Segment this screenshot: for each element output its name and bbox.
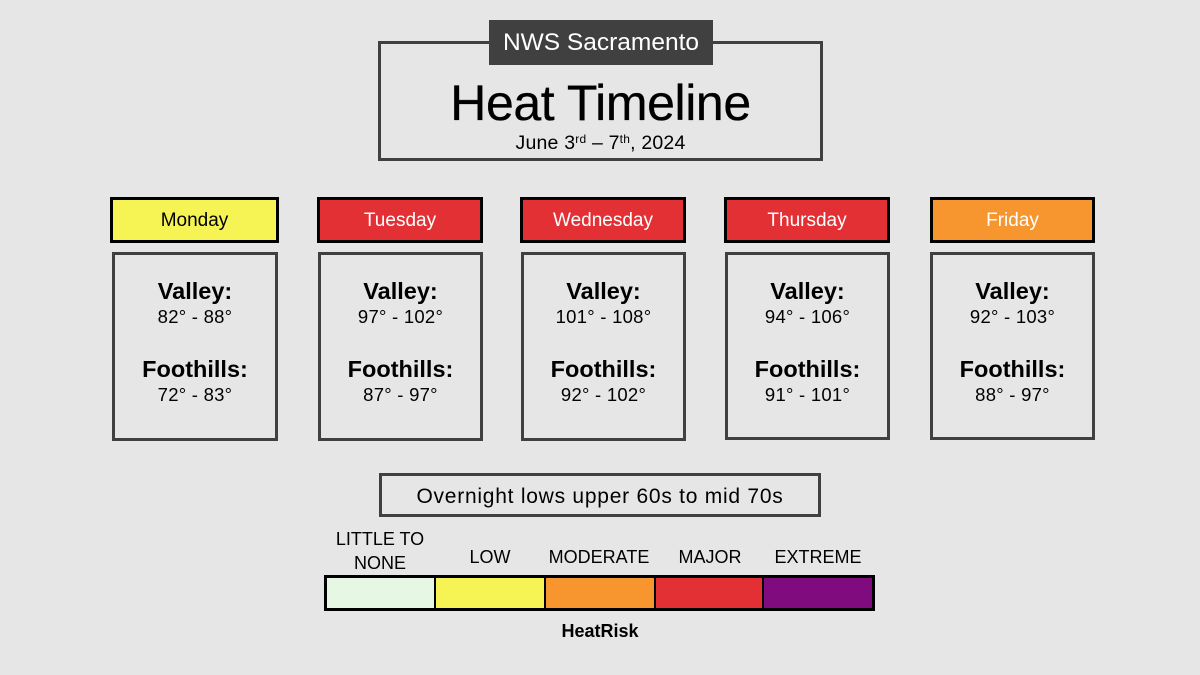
callout: overnight lows: Overnight lows upper 60s to mid 70s xyxy=(416,485,784,508)
swatch: moderate xyxy=(546,578,654,608)
day header: Thursday: Thursday xyxy=(767,210,847,231)
legend label: major: MAJOR xyxy=(678,547,742,567)
panel: Tuesday temperatures: Foothills: xyxy=(348,356,453,382)
panel: Wednesday temperatures: 101° - 108° xyxy=(556,306,651,327)
day header: Friday: Friday xyxy=(986,210,1039,231)
day header: Wednesday xyxy=(520,197,686,243)
panel: Tuesday temperatures: 97° - 102° xyxy=(358,306,443,327)
day header: Tuesday xyxy=(317,197,483,243)
legend label: low: LOW xyxy=(469,547,510,567)
HeatRisk colour scale xyxy=(324,575,875,611)
panel: Tuesday temperatures: 87° - 97° xyxy=(363,384,438,405)
panel: Monday temperatures xyxy=(112,252,278,441)
day header: Friday xyxy=(930,197,1095,243)
panel: Friday temperatures xyxy=(930,252,1095,440)
day header: Monday xyxy=(110,197,279,243)
day header: Monday: Monday xyxy=(161,210,228,231)
panel: Friday temperatures: 92° - 103° xyxy=(970,306,1055,327)
legend label: extreme: EXTREME xyxy=(774,547,862,567)
panel: Thursday temperatures xyxy=(725,252,890,440)
swatch: extreme xyxy=(764,578,872,608)
swatch: low xyxy=(436,578,544,608)
day header: Tuesday: Tuesday xyxy=(364,210,436,231)
day header: Thursday xyxy=(724,197,890,243)
badge: NWS Sacramento xyxy=(489,20,713,65)
panel: Wednesday temperatures: Foothills: xyxy=(551,356,656,382)
panel: Friday temperatures: Valley: xyxy=(975,278,1050,304)
legend label: little to none: NONE xyxy=(354,553,406,573)
legend label: little to none xyxy=(336,529,424,573)
panel: Monday temperatures: Valley: xyxy=(158,278,232,304)
swatch: little to none xyxy=(327,578,434,608)
panel: Wednesday temperatures xyxy=(521,252,686,441)
heading: Heat Timeline: Heat Timeline xyxy=(450,75,751,131)
panel: Tuesday temperatures: Valley: xyxy=(363,278,438,304)
panel: Thursday temperatures: 94° - 106° xyxy=(765,306,850,327)
panel: Wednesday temperatures: Valley: xyxy=(566,278,641,304)
callout: overnight lows xyxy=(379,473,821,517)
panel: Monday temperatures: 72° - 83° xyxy=(158,384,232,405)
legend title: HeatRisk: HeatRisk xyxy=(561,621,639,641)
panel: Wednesday temperatures: 92° - 102° xyxy=(561,384,646,405)
date range: June 3rd – 7th, 2024 xyxy=(516,132,686,154)
panel: Tuesday temperatures xyxy=(318,252,483,441)
panel: Thursday temperatures: 91° - 101° xyxy=(765,384,850,405)
badge: NWS Sacramento: NWS Sacramento xyxy=(503,29,699,56)
panel: Monday temperatures: Foothills: xyxy=(142,356,248,382)
panel: Friday temperatures: 88° - 97° xyxy=(975,384,1050,405)
swatch: major xyxy=(656,578,762,608)
panel: Thursday temperatures: Valley: xyxy=(770,278,845,304)
legend label: little to none: LITTLE TO xyxy=(336,529,424,549)
panel: Friday temperatures: Foothills: xyxy=(960,356,1065,382)
title box xyxy=(378,41,823,161)
panel: Monday temperatures: 82° - 88° xyxy=(158,306,232,327)
panel: Thursday temperatures: Foothills: xyxy=(755,356,860,382)
legend label: moderate: MODERATE xyxy=(549,547,649,567)
day header: Wednesday: Wednesday xyxy=(553,210,653,231)
